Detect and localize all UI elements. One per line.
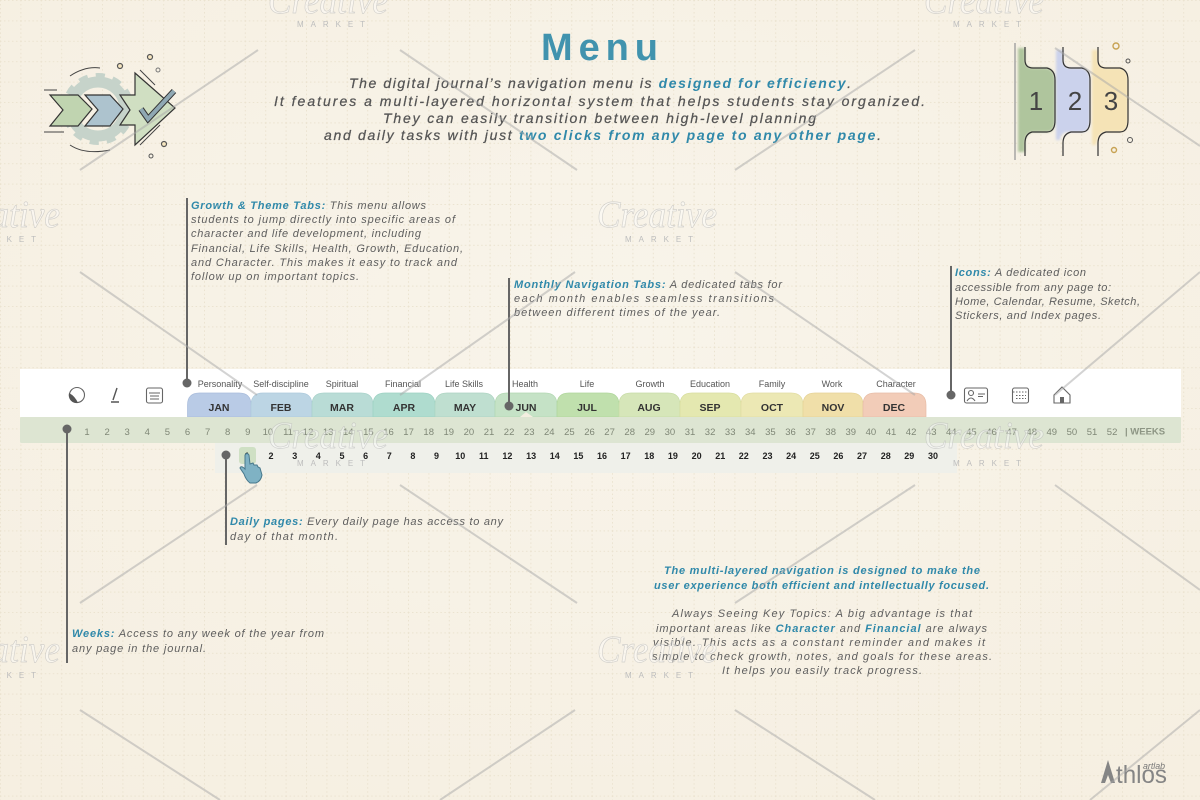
weeks bar: 27 <box>604 427 615 438</box>
icon: three numbered tabs: 1 <box>1029 86 1043 116</box>
callout: growth and theme tabs: students to jump directly into specific areas of <box>191 214 456 226</box>
text block: multi-layered navigation: important areas like Character and Financial are always <box>656 623 988 635</box>
tab topic labels: Growth <box>635 379 665 389</box>
weeks bar: 18 <box>423 427 434 438</box>
title: Menu <box>541 27 658 69</box>
daily pages bar: 15 <box>573 451 583 461</box>
month tabs: SEP <box>699 402 721 414</box>
month tabs <box>188 393 926 417</box>
text block: multi-layered navigation <box>652 565 992 677</box>
daily pages bar: 10 <box>455 451 465 461</box>
tab topic labels: Health <box>512 379 538 389</box>
daily pages bar: 21 <box>715 451 725 461</box>
weeks bar: 17 <box>403 427 414 438</box>
month tabs: OCT <box>761 402 784 414</box>
text block: multi-layered navigation: Always Seeing Key Topics: A big advantage is that <box>671 608 973 620</box>
month tabs: NOV <box>822 402 844 414</box>
daily pages bar: 12 <box>502 451 512 461</box>
weeks bar: 43 <box>926 427 936 438</box>
callout: growth and theme tabs <box>191 200 463 283</box>
tab topic labels: Personality <box>198 379 243 389</box>
daily pages bar: 22 <box>739 451 749 461</box>
callout: weeks <box>72 628 324 655</box>
month tabs: APR <box>393 402 416 414</box>
tool icons right <box>964 387 1070 403</box>
weeks bar: 22 <box>504 427 514 438</box>
tab topic labels: Family <box>759 379 786 389</box>
watermark: Creative Market: MARKET <box>953 20 1021 29</box>
month tabs: MAR <box>330 402 354 414</box>
weeks bar: 38 <box>825 427 836 438</box>
weeks bar: 5 <box>165 427 170 438</box>
logo: Athlos artlab: artlab <box>1143 761 1165 771</box>
tab topic labels <box>198 379 916 389</box>
weeks bar: 23 <box>524 427 534 438</box>
tab topic labels: Financial <box>385 379 421 389</box>
daily pages bar: 17 <box>621 451 631 461</box>
daily pages bar: 8 <box>410 451 415 461</box>
callout: weeks: any page in the journal. <box>72 643 206 655</box>
leader: monthly tabs <box>504 278 514 410</box>
icon: three numbered tabs: 2 <box>1068 86 1082 116</box>
weeks bar: 10 <box>263 427 273 438</box>
daily pages bar: 9 <box>434 451 439 461</box>
tab topic labels: Character <box>876 379 916 389</box>
daily pages bar: 3 <box>292 451 297 461</box>
weeks bar: 46 <box>986 427 997 438</box>
weeks bar: 52 <box>1107 427 1117 438</box>
callout: icons: Icons: A dedicated icon <box>955 267 1086 279</box>
weeks bar: 42 <box>906 427 916 438</box>
weeks bar: 9 <box>245 427 250 438</box>
month tabs: JUL <box>577 402 598 414</box>
weeks bar: 40 <box>866 427 876 438</box>
weeks bar: | WEEKS <box>1125 426 1165 438</box>
callout: icons: Stickers, and Index pages. <box>955 310 1101 322</box>
callout: daily pages: Daily pages: Every daily page has access to any <box>230 516 504 528</box>
weeks bar <box>20 417 1181 443</box>
month tabs: DEC <box>883 402 906 414</box>
weeks bar: 41 <box>886 427 896 438</box>
callout: icons <box>955 267 1140 322</box>
daily pages bar: 28 <box>881 451 891 461</box>
weeks bar: 48 <box>1026 427 1037 438</box>
daily pages bar: 30 <box>928 451 938 461</box>
daily pages bar: 27 <box>857 451 867 461</box>
daily pages bar: 11 <box>479 451 489 461</box>
daily pages bar: 14 <box>550 451 560 461</box>
callout: growth and theme tabs: character and life development, including <box>191 228 422 240</box>
icon: three numbered tabs <box>1015 43 1132 160</box>
weeks bar: 31 <box>685 427 695 438</box>
intro text: They can easily transition between high-level planning <box>383 110 816 126</box>
daily pages bar: 23 <box>762 451 773 461</box>
intro text: It features a multi-layered horizontal system that helps students stay organized. <box>274 93 925 109</box>
icon: three numbered tabs: 3 <box>1104 86 1118 116</box>
daily pages bar: 7 <box>387 451 392 461</box>
daily pages bar: 4 <box>316 451 321 461</box>
month tabs: FEB <box>270 402 292 414</box>
watermark: Creative Market: Creative <box>924 415 1044 457</box>
daily pages bar: 2 <box>268 451 274 461</box>
daily pages bar: 24 <box>786 451 796 461</box>
leader: daily pages <box>222 450 230 545</box>
callout: daily pages <box>230 516 504 543</box>
callout: growth and theme tabs: Growth & Theme Tabs: This menu allows <box>191 200 426 212</box>
watermark: Creative Market: Creative <box>597 194 717 236</box>
weeks bar: 21 <box>484 427 494 438</box>
weeks bar: 37 <box>805 427 816 438</box>
daily pages bar: 19 <box>668 451 678 461</box>
daily pages bar: 26 <box>833 451 843 461</box>
text block: multi-layered navigation: visible. This acts as a constant reminder and makes it <box>653 637 986 649</box>
text block: multi-layered navigation: user experience both efficient and intellectually focused. <box>654 580 989 592</box>
weeks bar: 26 <box>584 427 595 438</box>
weeks bar: 13 <box>323 427 333 438</box>
daily pages bar: 6 <box>363 451 368 461</box>
callout: daily pages: day of that month. <box>230 531 338 543</box>
callout: monthly navigation tabs: each month enables seamless transitions <box>514 293 774 305</box>
leader: growth tabs <box>182 198 192 388</box>
weeks bar: 35 <box>765 427 776 438</box>
callout: icons: Home, Calendar, Resume, Sketch, <box>955 296 1140 308</box>
daily pages bar <box>215 443 957 473</box>
logo: Athlos artlab: thlos <box>1116 761 1167 789</box>
weeks bar: 33 <box>725 427 735 438</box>
weeks bar: 25 <box>564 427 575 438</box>
daily pages bar: 13 <box>526 451 536 461</box>
weeks bar: 14 <box>343 427 354 438</box>
weeks bar: 11 <box>283 427 293 438</box>
navigation band <box>20 369 1181 417</box>
weeks bar: 34 <box>745 427 756 438</box>
weeks bar: 20 <box>464 427 474 438</box>
weeks bar: 28 <box>624 427 635 438</box>
daily pages bar: 20 <box>692 451 702 461</box>
weeks bar: 36 <box>785 427 796 438</box>
weeks bar: 19 <box>444 427 454 438</box>
callout: growth and theme tabs: Financial, Life Skills, Health, Growth, Education, <box>191 243 463 255</box>
tab topic labels: Life Skills <box>445 379 484 389</box>
daily pages bar: 18 <box>644 451 654 461</box>
callout: weeks: Weeks: Access to any week of the year from <box>72 628 324 640</box>
watermark: Creative Market: MARKET <box>297 20 365 29</box>
intro text: The digital journal’s navigation menu is designed for efficiency. <box>349 75 851 91</box>
weeks bar: 49 <box>1047 427 1057 438</box>
weeks bar: 4 <box>145 427 150 438</box>
watermark: Creative Market: Creative <box>597 629 717 671</box>
weeks bar: 12 <box>303 427 313 438</box>
callout: icons: accessible from any page to: <box>955 282 1111 294</box>
watermark: Creative Market: MARKET <box>625 671 693 680</box>
weeks bar: 50 <box>1067 427 1077 438</box>
daily pages bar: 16 <box>597 451 607 461</box>
intro text <box>274 75 925 143</box>
watermark: Creative Market: Creative <box>268 415 388 457</box>
weeks bar: 47 <box>1006 427 1017 438</box>
tab topic labels: Work <box>822 379 843 389</box>
watermark: Creative Market: MARKET <box>297 459 365 468</box>
icon: hand cursor <box>240 454 262 483</box>
callout: monthly navigation tabs: Monthly Navigation Tabs: A dedicated tabs for <box>514 279 783 291</box>
watermark: Creative Market: MARKET <box>953 459 1021 468</box>
daily pages bar: 25 <box>810 451 820 461</box>
weeks bar: 7 <box>205 427 210 438</box>
tab topic labels: Self-discipline <box>253 379 309 389</box>
weeks bar: 51 <box>1087 427 1097 438</box>
leader: weeks <box>62 424 72 663</box>
weeks bar: 24 <box>544 427 555 438</box>
callout: monthly navigation tabs <box>514 279 783 319</box>
weeks bar: 3 <box>125 427 130 438</box>
weeks bar: 16 <box>383 427 394 438</box>
daily pages bar: 5 <box>339 451 345 461</box>
weeks bar: 15 <box>363 427 374 438</box>
leader: icons <box>946 266 956 400</box>
weeks bar: 8 <box>225 427 230 438</box>
weeks bar: 6 <box>185 427 190 438</box>
tool icons left <box>69 388 162 403</box>
text block: multi-layered navigation: The multi-layered navigation is designed to make the <box>664 565 980 577</box>
callout: monthly navigation tabs: between different times of the year. <box>514 307 720 319</box>
weeks bar: 2 <box>104 427 110 438</box>
text block: multi-layered navigation: simple to check growth, notes, and goals for these areas. <box>652 651 992 663</box>
weeks bar: 39 <box>846 427 856 438</box>
month tabs: AUG <box>637 402 661 414</box>
daily pages bar: 1 <box>244 451 250 461</box>
callout: growth and theme tabs: and Character. This makes it easy to track and <box>191 257 458 269</box>
weeks bar: 45 <box>966 427 977 438</box>
weeks bar: 32 <box>705 427 715 438</box>
tab topic labels: Life <box>580 379 594 389</box>
text block: multi-layered navigation: It helps you easily track progress. <box>722 665 922 677</box>
month tabs: JUN <box>515 402 537 414</box>
daily pages bar: 29 <box>904 451 914 461</box>
intro text: and daily tasks with just two clicks from any page to any other page. <box>324 127 881 143</box>
month tabs: JAN <box>208 402 230 414</box>
weeks bar: 44 <box>946 427 957 438</box>
weeks bar: 1 <box>84 427 90 438</box>
month tabs: MAY <box>454 402 476 414</box>
callout: growth and theme tabs: follow up on important topics. <box>191 271 359 283</box>
tab topic labels: Spiritual <box>326 379 358 389</box>
icon: gear with arrows and check mark <box>44 54 175 158</box>
watermark: Creative Market <box>0 0 1044 680</box>
weeks bar: 29 <box>645 427 655 438</box>
watermark: Creative Market: MARKET <box>625 235 693 244</box>
weeks bar: 30 <box>665 427 675 438</box>
tab topic labels: Education <box>690 379 730 389</box>
